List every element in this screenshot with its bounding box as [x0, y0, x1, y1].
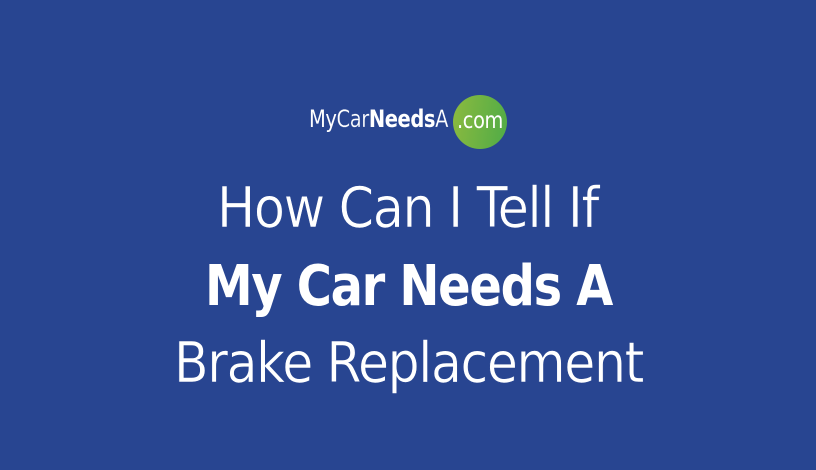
logo .com: .com [457, 108, 503, 134]
title line 1: How Can I Tell If [217, 176, 601, 241]
icon: green circle [453, 95, 507, 149]
logo [309, 95, 507, 149]
title line 3: Brake Replacement [174, 331, 643, 396]
title [174, 176, 643, 396]
title line 2: My Car Needs A [205, 254, 614, 319]
logo wordmark: MyCarNeedsA [309, 105, 449, 133]
